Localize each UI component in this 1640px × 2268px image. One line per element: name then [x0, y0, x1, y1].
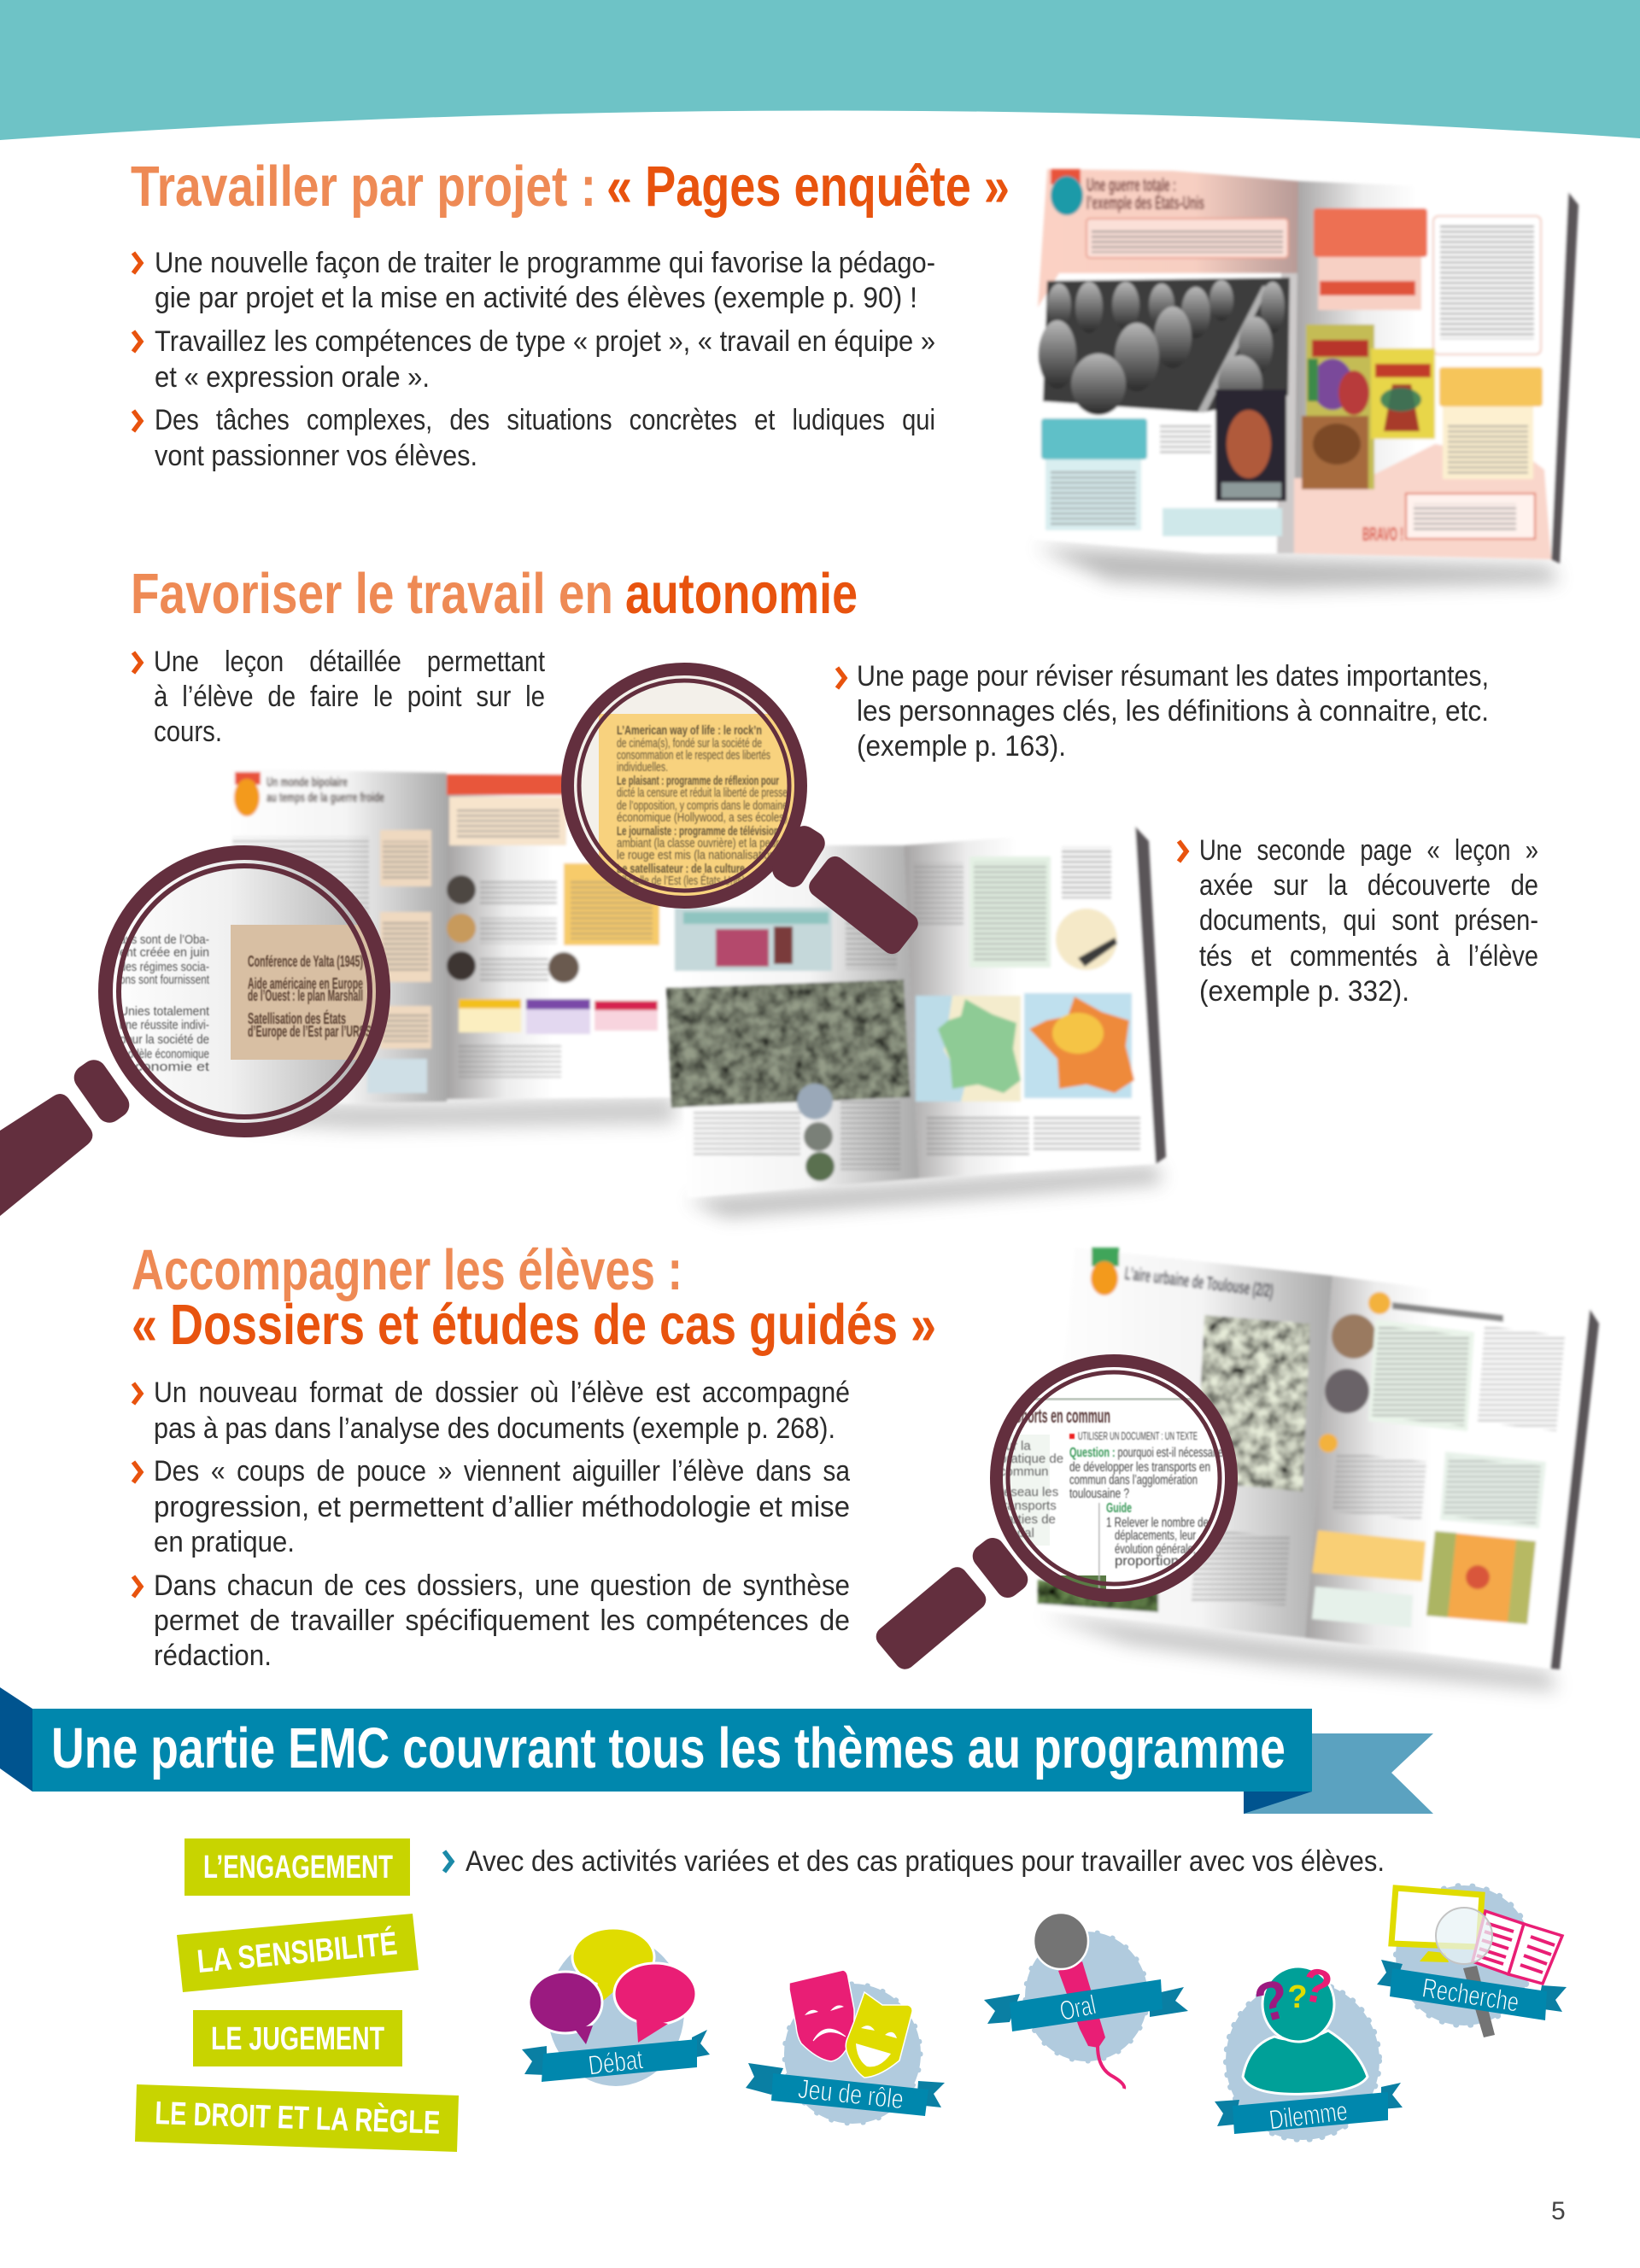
magnifier: transports en commun: UTILISER UN DOCUMENT : UN TEXTE: [1078, 1429, 1198, 1442]
magnifier: american way of life: consommation et le respect des libertés: [617, 748, 770, 763]
icon: dilemme: Dilemme: [1268, 2096, 1350, 2136]
label: engagement: L’ENGAGEMENT: [203, 1850, 393, 1885]
icon: recherche: [1377, 1885, 1567, 2037]
heading: Accompagner les eleves: Accompagner les élèves :: [132, 1238, 682, 1302]
magnifier: transports en commun: déplacements, leur: [1115, 1529, 1196, 1543]
bullet list: projet: Des tâches complexes, des situations concrètes et ludiques qui: [155, 404, 935, 436]
heading: Travailler par projet: « Pages enquête »: [606, 155, 1010, 219]
magnifier: american way of life: Le satellisateur : de la culture: [617, 862, 745, 876]
text block: page pour reviser: les personnages clés, les définitions à connaitre, etc.: [857, 695, 1489, 728]
magnifier: american way of life: dicté la censure et réduit la liberté de presse: [617, 786, 788, 800]
text block: lecon detaillee: à l’élève de faire le point sur le: [154, 681, 545, 713]
magnifier: american way of life: Le journaliste : programme de télévision: [617, 824, 779, 839]
magnifier: conference de Yalta: pour la société de: [120, 1032, 209, 1047]
text block: seconde page lecon: tés et commentés à l’élève: [1199, 940, 1538, 973]
bullet list: dossiers: permet de travailler spécifiquement les compétences de: [154, 1605, 850, 1637]
label: sensibilite: LA SENSIBILITÉ: [196, 1924, 399, 1980]
magnifier: conference de Yalta: ent créée en juin: [120, 945, 209, 960]
magnifier: transports en commun: sur la: [999, 1439, 1031, 1453]
magnifier: transports en commun: 1 Relever le nombre de: [1106, 1516, 1209, 1530]
bullet list: dossiers: progression, et permettent d’allier méthodologie et mise: [154, 1491, 850, 1523]
icon: jeu de role: Jeu de rôle: [797, 2073, 905, 2114]
label: jugement: LE JUGEMENT: [211, 2021, 384, 2057]
book spread: Toulouse: L’aire urbaine de Toulouse (2/2): [1123, 1262, 1274, 1301]
magnifier: conference de Yalta: Satellisation des États: [248, 1009, 346, 1027]
magnifier: transports en commun: commun dans l’agglomération: [1069, 1473, 1198, 1488]
icon: debat: [522, 1928, 710, 2086]
magnifier: transports en commun: commun: [999, 1464, 1049, 1479]
heading: Travailler par projet: Travailler par projet :: [131, 155, 596, 219]
text block: lecon detaillee: [133, 646, 545, 748]
bullet list: projet: Une nouvelle façon de traiter le programme qui favorise la pédago-: [155, 247, 935, 279]
section: autonomie: [0, 562, 1538, 1217]
magnifier: transports en commun: évolution générale,: [1115, 1542, 1196, 1557]
bullet list: dossiers: rédaction.: [154, 1640, 272, 1672]
magnifier: conference de Yalta: l’économie et: [120, 1060, 210, 1074]
book spread: guerre totale: BRAVO !: [1362, 523, 1403, 545]
magnifier: transports en commun: [872, 1354, 1239, 1674]
book spread: carte de France: [666, 827, 1166, 1217]
text block: seconde page lecon: [1179, 834, 1538, 1008]
magnifier: transports en commun: proportion: [1115, 1554, 1179, 1569]
icon: dilemme: ?: [1287, 1979, 1308, 2015]
label: jugement: [193, 2010, 402, 2066]
magnifier: conference de Yalta: de l’Ouest : le plan Marshall: [248, 987, 363, 1004]
magnifier: transports en commun: parties de: [999, 1512, 1056, 1527]
text block: page pour reviser: Une page pour réviser résumant les dates importantes,: [857, 660, 1489, 693]
magnifier: transports en commun: réseau les: [999, 1485, 1058, 1499]
icon: dilemme: ?: [1297, 1956, 1337, 2015]
book spread: monde bipolaire: Un monde bipolaire: [266, 775, 348, 790]
magnifier: transports en commun: Guide: [1106, 1501, 1132, 1516]
bullet list: projet: gie par projet et la mise en activité des élèves (exemple p. 90) !: [155, 282, 917, 314]
section: pages enquete: [131, 155, 1578, 589]
magnifier: conference de Yalta: modèle économique: [120, 1047, 209, 1061]
magnifier: transports en commun: Question : pourquoi est-il nécessaire: [1069, 1446, 1223, 1460]
magnifier: transports en commun: de développer les transports en: [1069, 1460, 1210, 1475]
intro text: activites variees: Avec des activités variées et des cas pratiques pour travailler avec vos élèves.: [466, 1845, 1385, 1878]
book spread: monde bipolaire: au temps de la guerre froide: [266, 791, 384, 805]
heading: Accompagner les eleves: « Dossiers et études de cas guidés »: [132, 1293, 936, 1357]
text block: page pour reviser: [837, 660, 1489, 763]
banner: partie EMC: Une partie EMC couvrant tous les thèmes au programme: [51, 1716, 1286, 1780]
label: sensibilite: [177, 1914, 419, 1992]
icon: oral: [984, 1913, 1188, 2089]
magnifier: american way of life: [561, 662, 922, 958]
magnifier: conference de Yalta: Aide américaine en Europe: [248, 975, 363, 992]
magnifier: transports en commun: transports en commun: [995, 1405, 1110, 1427]
heading: Travailler par projet: [131, 155, 1010, 219]
text block: seconde page lecon: Une seconde page « leçon »: [1199, 834, 1538, 867]
magnifier: transports en commun: toulousaine ?: [1069, 1487, 1129, 1501]
bullet list: dossiers: Un nouveau format de dossier où l’élève est accompagné: [154, 1377, 850, 1409]
magnifier: american way of life: L’American way of life : le rock’n: [617, 723, 762, 738]
label: engagement: [184, 1838, 410, 1896]
icon: dilemme: [1215, 1956, 1403, 2140]
icon: dilemme: ?: [1248, 1967, 1297, 2035]
bullet list: projet: [133, 247, 935, 472]
text block: seconde page lecon: (exemple p. 332).: [1199, 975, 1409, 1008]
magnifier: conference de Yalta: ays sont de l’Oba-: [120, 932, 209, 947]
icon: recherche: Recherche: [1420, 1972, 1521, 2018]
heading: Favoriser le travail: Favoriser le travail en: [131, 562, 613, 626]
book spread: monde bipolaire: [224, 769, 683, 1129]
magnifier: conference de Yalta: [0, 845, 390, 1216]
bullet list: dossiers: Des « coups de pouce » viennent aiguiller l’élève dans sa: [154, 1455, 850, 1488]
magnifier: american way of life: Le plaisant : programme de réflexion pour: [617, 774, 779, 788]
magnifier: transports en commun: pratique de: [999, 1452, 1063, 1466]
magnifier: american way of life: le rouge est mis (la nationalisation): [617, 848, 779, 862]
magnifier: conference de Yalta: une réussite indivi-: [120, 1018, 209, 1032]
text block: page pour reviser: (exemple p. 163).: [857, 730, 1066, 763]
icon: oral: Oral: [1057, 1989, 1098, 2026]
magnifier: conference de Yalta: ons sont fournissent: [120, 973, 210, 987]
magnifier: transports en commun: modal: [999, 1526, 1034, 1540]
magnifier: american way of life: ambiant (la classe ouvrière) et la peur: [617, 836, 779, 850]
magnifier: conference de Yalta: Unies totalement: [120, 1004, 210, 1019]
text block: seconde page lecon: documents, qui sont présen-: [1199, 904, 1538, 937]
heading: Accompagner les eleves: [132, 1238, 936, 1357]
magnifier: conference de Yalta: d’Europe de l’Est par l’URSS: [248, 1023, 372, 1040]
icon: debat: Débat: [587, 2043, 645, 2081]
magnifier: american way of life: économique (Hollywood, a ses écoles): [617, 810, 788, 825]
magnifier: american way of life: officielle de l’Est (les États-Unis): [617, 874, 745, 888]
text block: lecon detaillee: cours.: [154, 716, 222, 748]
banner: partie EMC: [0, 1687, 1433, 1814]
bullet list: projet: et « expression orale ».: [155, 361, 430, 394]
bullet list: dossiers: Dans chacun de ces dossiers, une question de synthèse: [154, 1569, 850, 1602]
magnifier: conference de Yalta: des régimes socia-: [120, 960, 209, 974]
magnifier: american way of life: de l’opposition, y compris dans le domaine: [617, 798, 788, 813]
magnifier: american way of life: individuelles.: [617, 760, 668, 775]
book spread: guerre totale: [1032, 169, 1578, 589]
bullet list: dossiers: en pratique.: [154, 1526, 295, 1558]
header band: [0, 0, 1640, 140]
section: dossiers guides: [132, 1238, 1599, 1691]
book spread: guerre totale: Une guerre totale :: [1086, 174, 1176, 196]
icon: jeu de role: [746, 1970, 945, 2124]
magnifier: american way of life: de cinéma(s), fondé sur la société de: [617, 736, 762, 751]
page number: 5: [1551, 2197, 1566, 2225]
heading: Favoriser le travail: autonomie: [625, 562, 858, 626]
text block: lecon detaillee: Une leçon détaillée permettant: [154, 646, 545, 678]
book spread: Toulouse: [1038, 1248, 1599, 1691]
label: droit et regle: LE DROIT ET LA RÈGLE: [155, 2094, 441, 2142]
label: droit et regle: [135, 2084, 459, 2152]
book spread: guerre totale: l’exemple des États-Unis: [1086, 192, 1204, 213]
magnifier: transports en commun: transports: [999, 1499, 1057, 1513]
bullet list: projet: Travaillez les compétences de type « projet », « travail en équipe »: [155, 325, 935, 358]
bullet list: dossiers: [133, 1377, 850, 1672]
magnifier: conference de Yalta: Conférence de Yalta (1945): [248, 953, 363, 970]
text block: seconde page lecon: axée sur la découverte de: [1199, 869, 1538, 902]
bullet list: dossiers: pas à pas dans l’analyse des documents (exemple p. 268).: [154, 1412, 835, 1445]
bullet list: projet: vont passionner vos élèves.: [155, 440, 477, 472]
